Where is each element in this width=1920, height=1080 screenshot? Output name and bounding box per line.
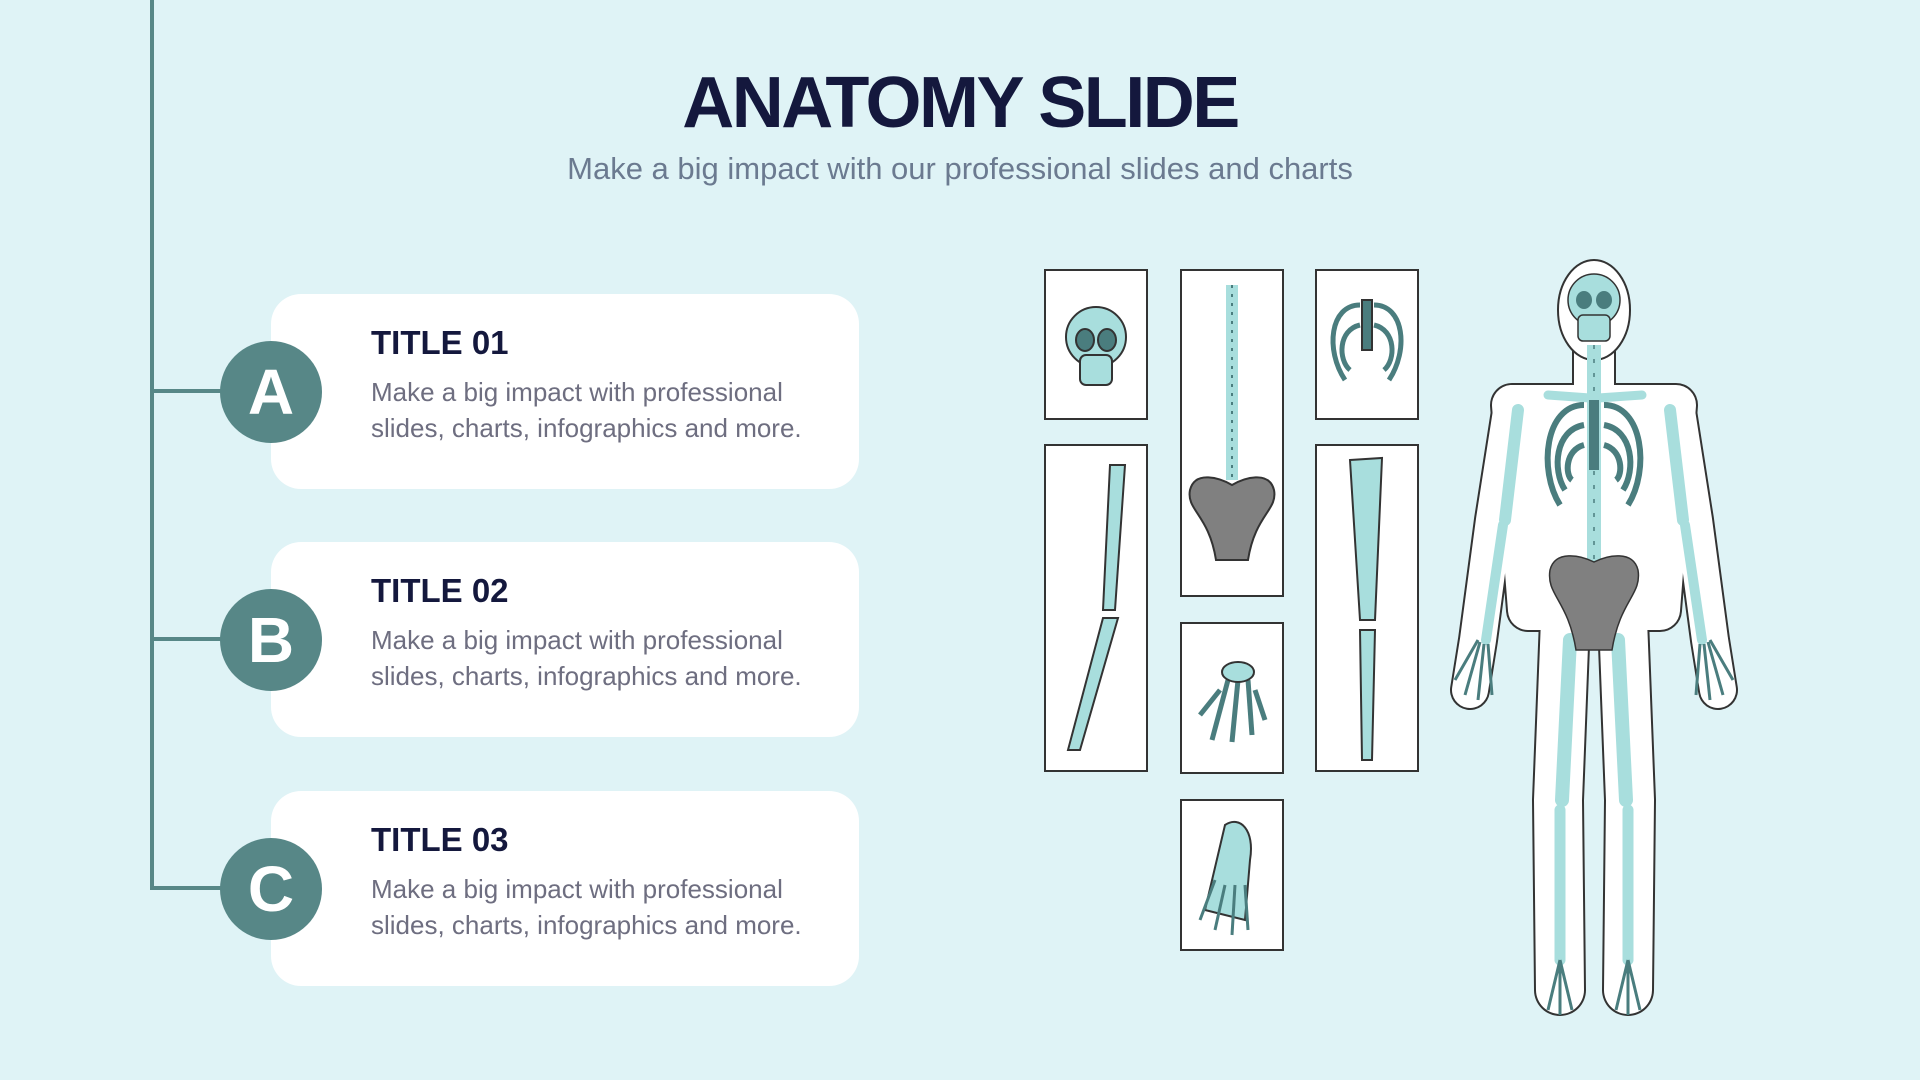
panel: spine	[1181, 270, 1283, 596]
card A	[271, 294, 859, 489]
hands and feet	[1455, 640, 1733, 1015]
circle B	[220, 589, 322, 691]
card A: TITLE 01	[371, 324, 509, 361]
circle A: A	[248, 356, 294, 428]
card B: Make a big impact with professional	[371, 625, 783, 655]
card A: slides, charts, infographics and more.	[371, 413, 802, 443]
panel: arm	[1045, 445, 1147, 771]
panel: ribcage	[1316, 270, 1418, 419]
panel: leg	[1316, 445, 1418, 771]
card B: TITLE 02	[371, 572, 509, 609]
ribcage	[1548, 405, 1640, 505]
card C: slides, charts, infographics and more.	[371, 910, 802, 940]
vertical timeline line	[150, 0, 154, 890]
title: ANATOMY SLIDE	[682, 63, 1238, 143]
panel: hand	[1181, 623, 1283, 773]
card A: Make a big impact with professional	[371, 377, 783, 407]
clavicles and arm bones	[1486, 395, 1702, 960]
card C	[271, 791, 859, 986]
card B	[271, 542, 859, 737]
circle C	[220, 838, 322, 940]
card B: slides, charts, infographics and more.	[371, 661, 802, 691]
circle A	[220, 341, 322, 443]
circle B: B	[248, 604, 294, 676]
subtitle: Make a big impact with our professional slides and charts	[567, 151, 1353, 186]
spine	[1587, 345, 1601, 580]
panel: skull	[1045, 270, 1147, 419]
panel: foot	[1181, 800, 1283, 950]
pelvis	[1550, 556, 1638, 650]
circle C: C	[248, 853, 294, 925]
card C: TITLE 03	[371, 821, 509, 858]
card C: Make a big impact with professional	[371, 874, 783, 904]
full body skeleton	[1455, 260, 1733, 1015]
skull	[1568, 274, 1620, 326]
